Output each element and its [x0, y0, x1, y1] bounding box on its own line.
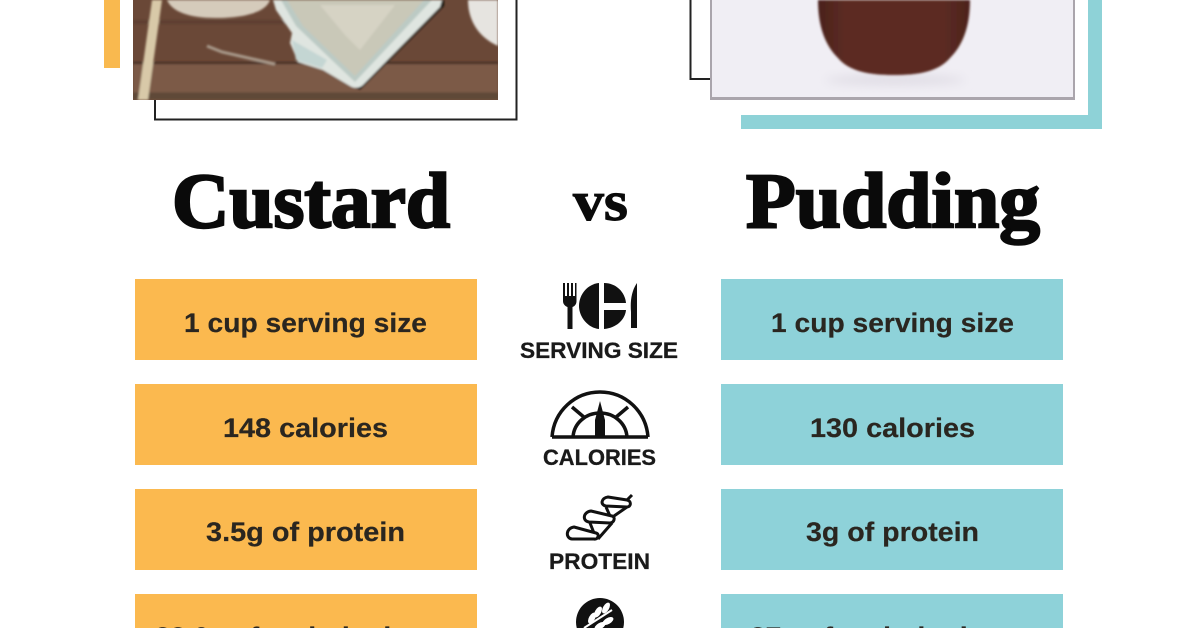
pudding row: protein: [721, 489, 1063, 570]
pudding row: calories: 130 calories: [810, 413, 975, 443]
icon: carbohydrates grain: [576, 598, 624, 628]
pudding photo frame: [690, 0, 712, 79]
pudding row: calories: [721, 384, 1063, 465]
custard row: carbohydrates: [135, 594, 477, 628]
pudding row: protein: 3g of protein: [806, 517, 979, 547]
icon: protein strand: [567, 495, 632, 539]
pudding row: serving size: 1 cup serving size: [771, 308, 1014, 338]
custard row: calories: 148 calories: [223, 413, 388, 443]
custard row: serving size: [135, 279, 477, 360]
icon: calories gauge: [552, 392, 648, 437]
icon: serving size: [563, 283, 637, 329]
custard photo frame: [155, 0, 516, 120]
custard row: serving size: 1 cup serving size: [184, 308, 427, 338]
custard accent bar: [104, 0, 120, 68]
custard row: protein: [135, 489, 477, 570]
label: protein: PROTEIN: [549, 549, 650, 574]
pudding row: serving size: [721, 279, 1063, 360]
pudding cup: [818, 0, 970, 75]
title: vs: vs: [573, 171, 628, 233]
title: Custard: Custard: [172, 157, 450, 244]
pudding row: carbohydrates: [721, 594, 1063, 628]
custard photo: [133, 0, 498, 100]
custard row: calories: [135, 384, 477, 465]
pudding photo: [710, 0, 1075, 100]
label: calories: CALORIES: [543, 445, 656, 470]
pudding accent frame: [741, 0, 1095, 122]
title: Pudding: Pudding: [746, 157, 1040, 244]
label: serving size: SERVING SIZE: [520, 338, 678, 363]
custard row: protein: 3.5g of protein: [206, 517, 405, 547]
